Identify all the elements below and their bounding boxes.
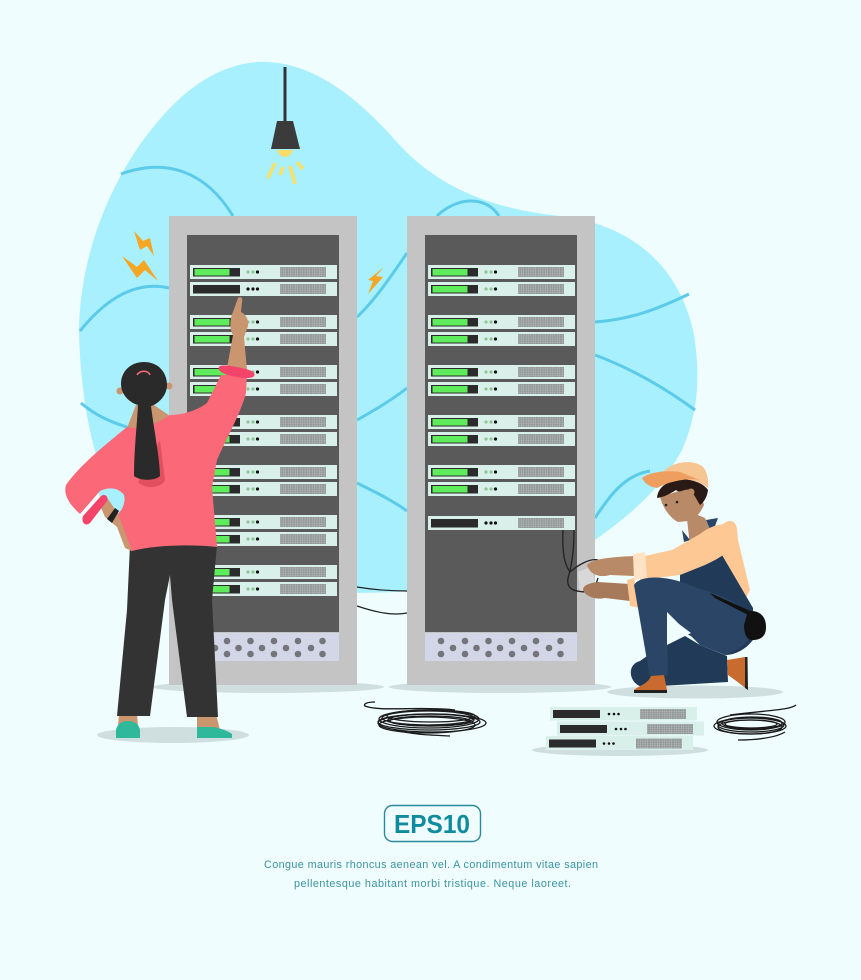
man: rear foot bbox=[727, 657, 748, 690]
woman: shoes bbox=[116, 721, 232, 738]
woman: hair tie bbox=[137, 371, 150, 375]
woman: watch bbox=[107, 508, 119, 523]
man: torso shirt bbox=[690, 521, 750, 600]
man: gap under knee bbox=[667, 615, 691, 645]
man: rear knee and lower leg bbox=[631, 633, 728, 687]
woman: trousers bbox=[117, 545, 218, 717]
woman: hair shadow bbox=[138, 440, 165, 487]
black cables between racks bbox=[357, 587, 407, 614]
caption text: Congue mauris rhoncus aenean vel. A condimentum vitae sapien bbox=[264, 859, 598, 871]
man: neck bbox=[686, 510, 712, 546]
woman: ponytail and head bbox=[121, 362, 167, 480]
lightning bolts bbox=[122, 231, 384, 294]
left cable coil bbox=[364, 702, 486, 736]
woman: lower hand bbox=[99, 499, 132, 551]
man: overalls bib bbox=[680, 555, 753, 655]
man technician bbox=[583, 462, 766, 693]
blob wires bbox=[80, 167, 695, 518]
woman: sweater cuffs bbox=[82, 495, 108, 524]
caption text: pellentesque habitant morbi tristique. Neque laoreet. bbox=[294, 878, 571, 890]
cables from server to man's hands bbox=[563, 530, 598, 592]
right cable coil bbox=[714, 705, 796, 740]
man: front shoe bbox=[634, 675, 667, 690]
man: bag strap bbox=[710, 593, 755, 617]
right server rack bbox=[407, 216, 595, 685]
man: far arm and hand bbox=[583, 582, 630, 601]
caption text bbox=[264, 859, 598, 890]
woman: gap between arm and waist bbox=[98, 489, 128, 522]
woman: pink sweater bbox=[65, 375, 247, 551]
ground shadows bbox=[97, 681, 783, 756]
blue blob backdrop bbox=[79, 62, 697, 593]
man: overall strap bbox=[682, 518, 718, 542]
EPS10 badge: EPS10 bbox=[394, 809, 470, 839]
woman: neck and ears bbox=[127, 405, 170, 436]
woman: raised forearm and hand bbox=[227, 297, 248, 370]
man: cap bbox=[662, 462, 708, 488]
man: front leg bbox=[634, 578, 753, 678]
left server rack bbox=[169, 216, 357, 685]
man: hair bbox=[657, 479, 708, 505]
connector between man's hands bbox=[578, 566, 595, 593]
man: bag bbox=[744, 611, 766, 640]
hanging lamp bbox=[268, 67, 303, 184]
woman technician bbox=[65, 297, 255, 738]
man: face bbox=[660, 485, 704, 522]
stack of server units bbox=[546, 707, 704, 750]
man: ear bbox=[688, 488, 694, 496]
woman: ankles bbox=[118, 714, 220, 730]
man: eyes bbox=[665, 501, 678, 506]
man: near arm bbox=[640, 524, 737, 580]
